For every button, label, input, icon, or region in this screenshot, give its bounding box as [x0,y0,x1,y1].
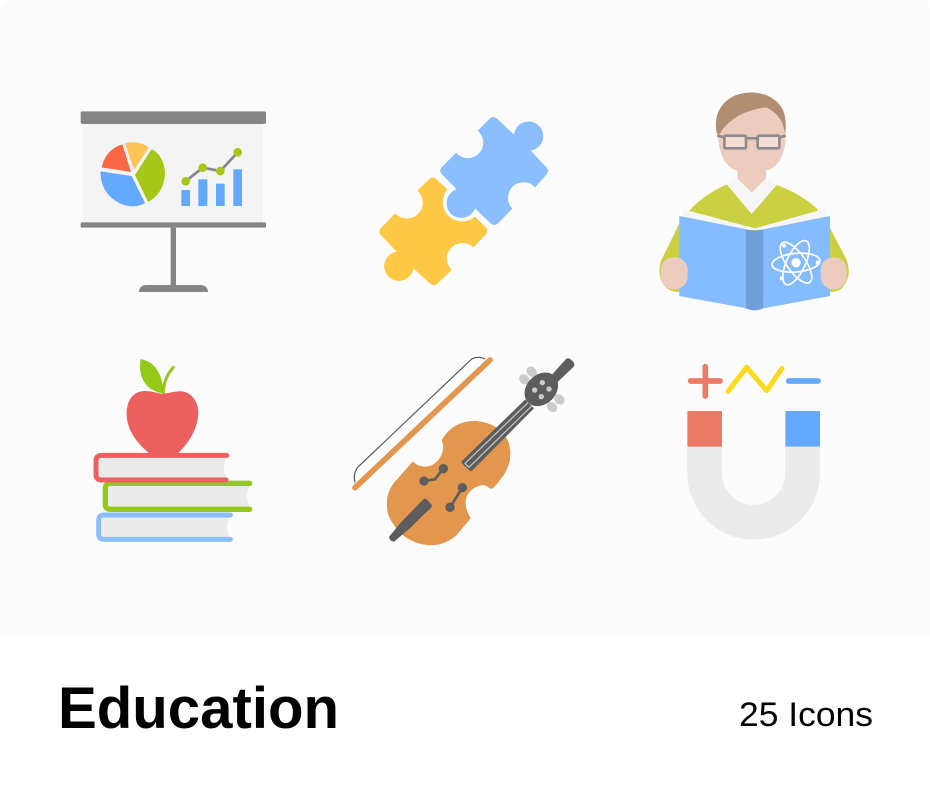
icon: violin and bow [354,357,574,545]
trend line [181,148,242,186]
icon: presentation board [81,111,266,292]
bar chart [181,169,242,206]
blue pole [785,411,820,447]
stand pole and base [139,228,208,292]
peg dots [532,380,552,399]
atom symbol [771,237,821,288]
icon: horseshoe magnet [687,367,820,540]
book left cover [679,216,747,308]
fingerboard and neck [462,399,534,471]
tailpiece [389,499,432,542]
sweater [659,184,849,292]
green book cover [105,483,250,509]
book right cover [763,216,830,308]
icon: apple on stacked books [96,359,251,539]
yellow puzzle piece [379,177,487,285]
apple [127,391,198,454]
bow hair [354,357,485,482]
icon: teacher reading a book [659,92,849,310]
minus sign [789,372,818,389]
green book pages [108,485,251,508]
right hand [821,257,847,289]
red pole [687,411,722,447]
shirt collar [727,178,777,214]
blue book cover [99,515,230,539]
title: Education [58,676,339,741]
top roller bar [81,111,266,124]
bottom rail [81,222,266,228]
red book pages [98,457,227,479]
tuning pegs [517,364,567,414]
scroll head [518,358,574,413]
glasses [717,136,786,148]
book spine [746,229,763,310]
hair [716,92,786,135]
apple leaf [140,359,163,393]
bow stick [355,360,490,488]
book pages [683,208,826,230]
face [718,93,786,171]
icon count: 25 Icons [739,696,873,734]
zigzag wave [728,367,782,391]
blue book pages [102,516,231,538]
neck [737,163,766,192]
board screen [83,123,263,223]
pie chart [101,142,165,206]
strings [465,402,532,467]
icon: jigsaw puzzle pieces [379,117,548,285]
f-hole left [419,464,448,486]
blue puzzle piece [440,117,548,225]
f-hole right [445,483,467,512]
apple stem [163,367,173,393]
magnet body [687,447,820,540]
left hand [661,257,688,289]
violin body [387,421,510,545]
plus sign [691,367,720,396]
red book cover [96,455,227,480]
